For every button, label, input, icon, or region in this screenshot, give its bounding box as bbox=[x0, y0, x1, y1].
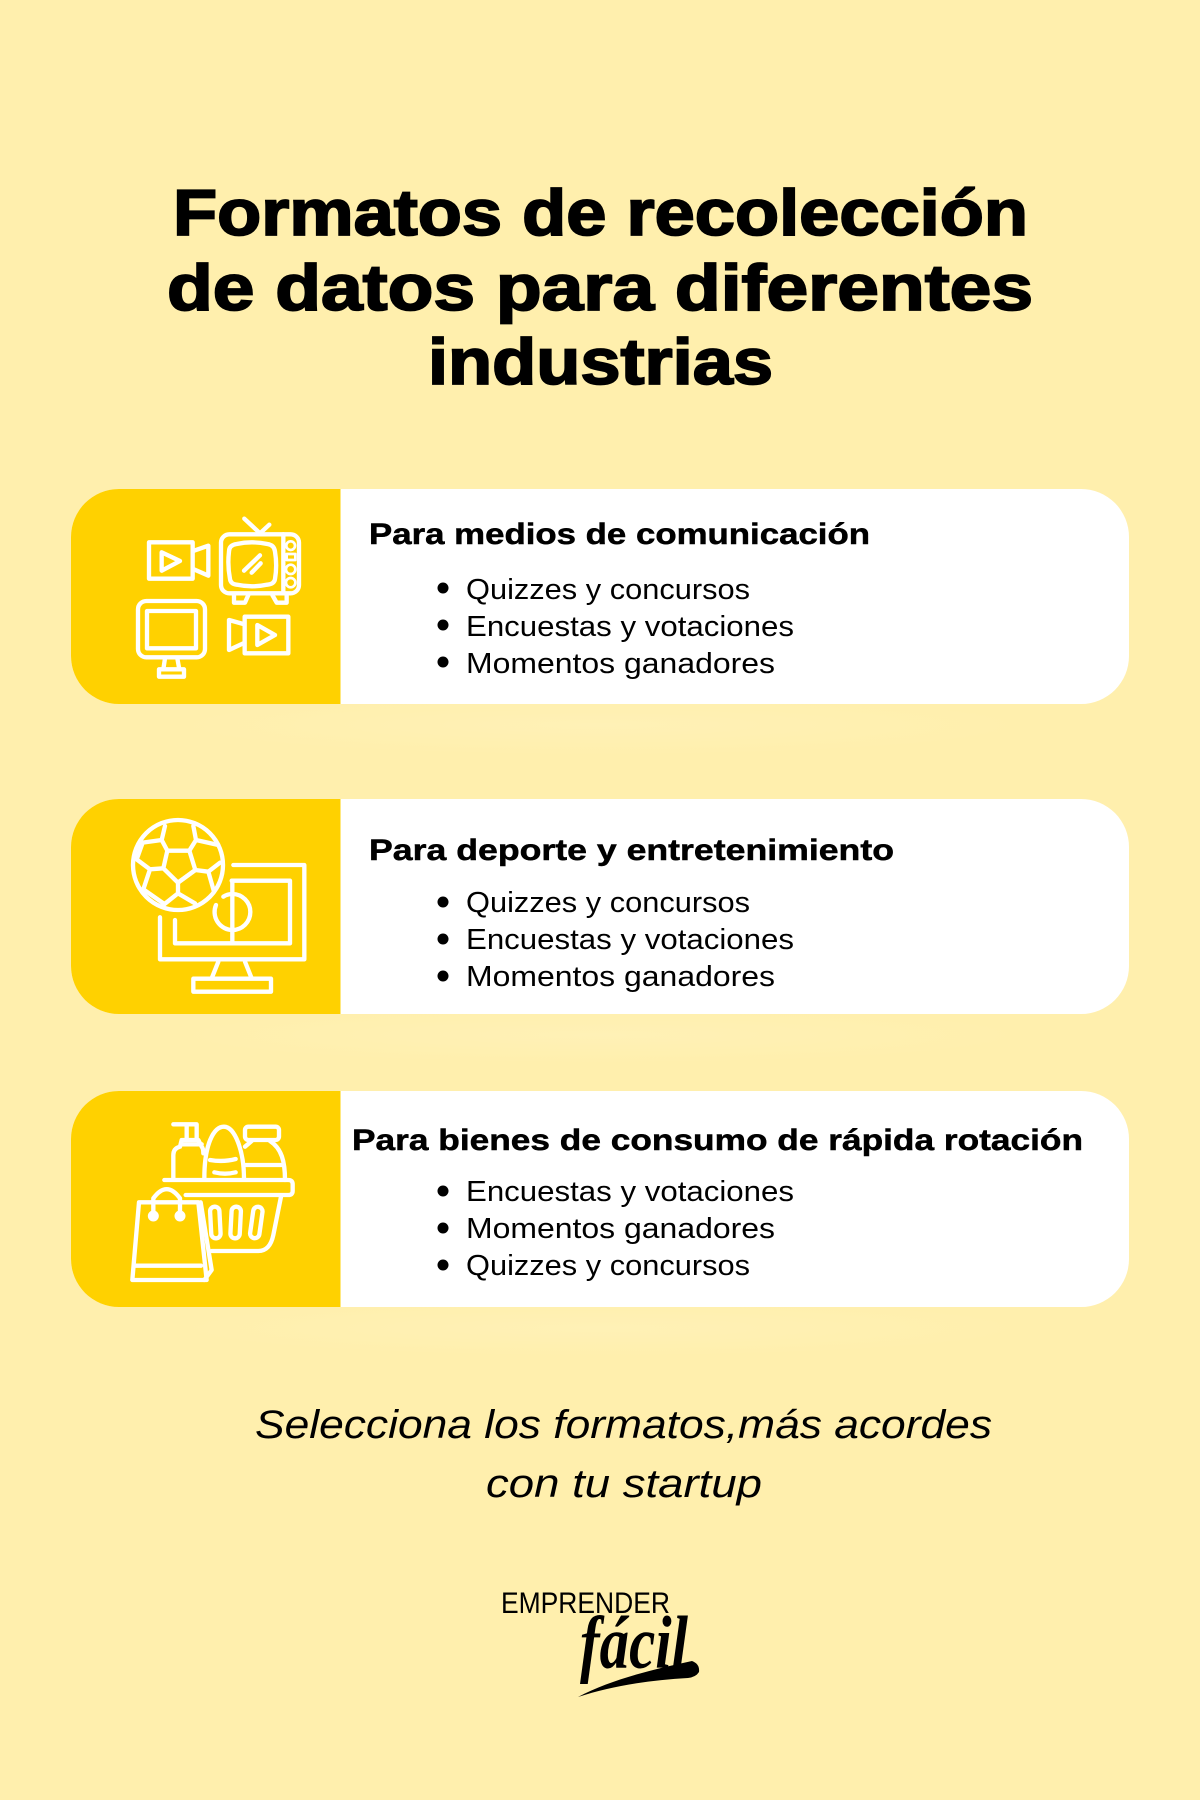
logo: Emprender Fácil: EMPRENDER bbox=[501, 1587, 670, 1620]
card background bbox=[71, 489, 1129, 704]
bullet list bbox=[438, 574, 794, 680]
bullet list: Momentos ganadores bbox=[466, 961, 775, 993]
icon: soccer ball and screen bbox=[133, 820, 304, 992]
yellow icon block bbox=[71, 1091, 340, 1307]
bullet list: Quizzes y concursos bbox=[466, 1250, 750, 1282]
title bbox=[167, 176, 1033, 398]
panel: bienes de consumo bbox=[71, 1091, 1129, 1307]
title: industrias bbox=[428, 325, 773, 398]
heading: Para deporte y entretenimiento bbox=[369, 834, 894, 867]
yellow icon block bbox=[71, 799, 340, 1014]
logo: Emprender Fácil bbox=[501, 1587, 699, 1697]
logo: Emprender Fácil: fácil bbox=[580, 1602, 688, 1685]
bullet list: Quizzes y concursos bbox=[466, 887, 750, 919]
bullet list: Momentos ganadores bbox=[466, 648, 775, 680]
panel: medios de comunicación bbox=[71, 489, 1129, 704]
bullet list: Encuestas y votaciones bbox=[466, 924, 794, 956]
bullet list: Encuestas y votaciones bbox=[466, 611, 794, 643]
card background bbox=[71, 799, 1129, 1014]
card background bbox=[71, 1091, 1129, 1307]
yellow icon block bbox=[71, 489, 340, 704]
bullet list: Encuestas y votaciones bbox=[466, 1176, 794, 1208]
closing message: con tu startup bbox=[486, 1462, 762, 1506]
panel: deporte y entretenimiento bbox=[71, 799, 1129, 1014]
icon: basket and shopping bag bbox=[132, 1124, 293, 1280]
icon: video and tv screens bbox=[138, 519, 299, 677]
title: Formatos de recolección bbox=[173, 176, 1028, 249]
closing message: Selecciona los formatos,más acordes bbox=[255, 1403, 992, 1447]
heading: Para bienes de consumo de rápida rotación bbox=[352, 1124, 1083, 1157]
heading: Para medios de comunicación bbox=[369, 518, 870, 551]
title: de datos para diferentes bbox=[167, 251, 1033, 324]
bullet list: Quizzes y concursos bbox=[466, 574, 750, 606]
closing message bbox=[255, 1403, 992, 1506]
bullet list bbox=[438, 1176, 794, 1282]
bullet list: Momentos ganadores bbox=[466, 1213, 775, 1245]
bullet list bbox=[438, 887, 794, 993]
